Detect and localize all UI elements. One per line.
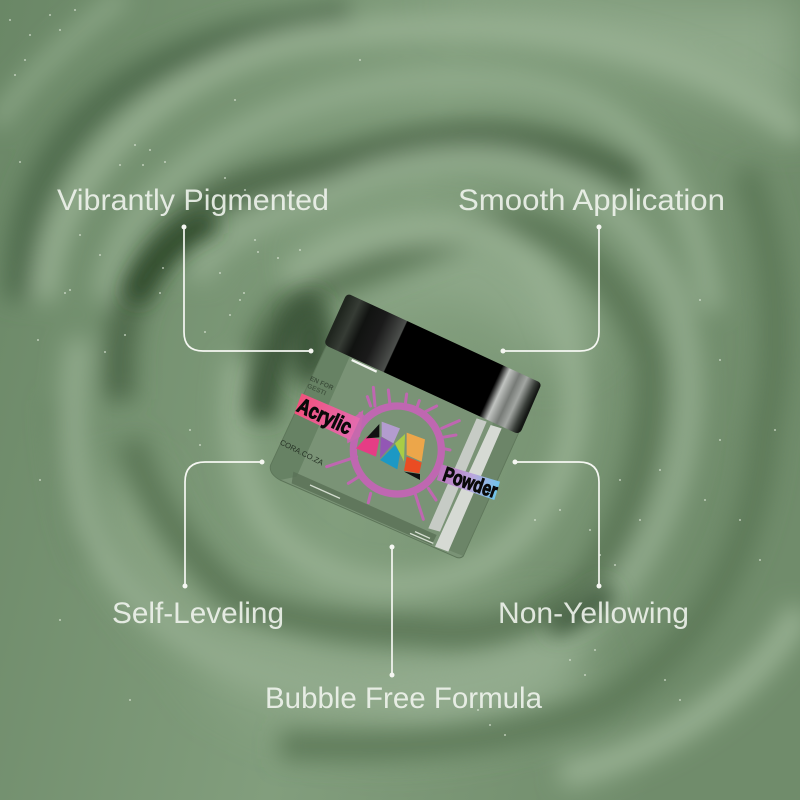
callout: Bubble Free Formula: Bubble Free Formula (265, 682, 542, 715)
callout: Vibrantly Pigmented: Vibrantly Pigmented (57, 184, 329, 217)
small label text: GESTI (306, 383, 327, 397)
callout: Smooth Application (458, 184, 725, 354)
jar lid (325, 295, 541, 433)
jar shadow (286, 303, 334, 387)
callout: Non-Yellowing (498, 460, 689, 630)
callout: Smooth Application: Smooth Application (458, 184, 725, 217)
pink splash ring (327, 387, 459, 519)
deep shadows (135, 222, 215, 300)
callout: Non-Yellowing: Non-Yellowing (498, 597, 689, 630)
dark swirl bands (20, 15, 350, 300)
white label stripes (428, 418, 502, 552)
light swirl bands (0, 0, 125, 125)
small label text: EN FOR (309, 375, 335, 392)
small label text: CORA.CO.ZA (278, 438, 326, 468)
callout: Self-Leveling (112, 460, 284, 630)
band: Powder (437, 463, 500, 503)
jar body (270, 345, 518, 558)
band: Acrylic: Acrylic (294, 393, 356, 439)
callout: Bubble Free Formula (265, 544, 542, 715)
logo: geometric colour blocks (356, 422, 425, 480)
band: Powder: Powder (440, 463, 500, 503)
small label text (278, 375, 335, 468)
product: acrylic powder jar (270, 295, 541, 558)
callout: Self-Leveling: Self-Leveling (112, 597, 284, 630)
callout: Vibrantly Pigmented (57, 184, 329, 354)
